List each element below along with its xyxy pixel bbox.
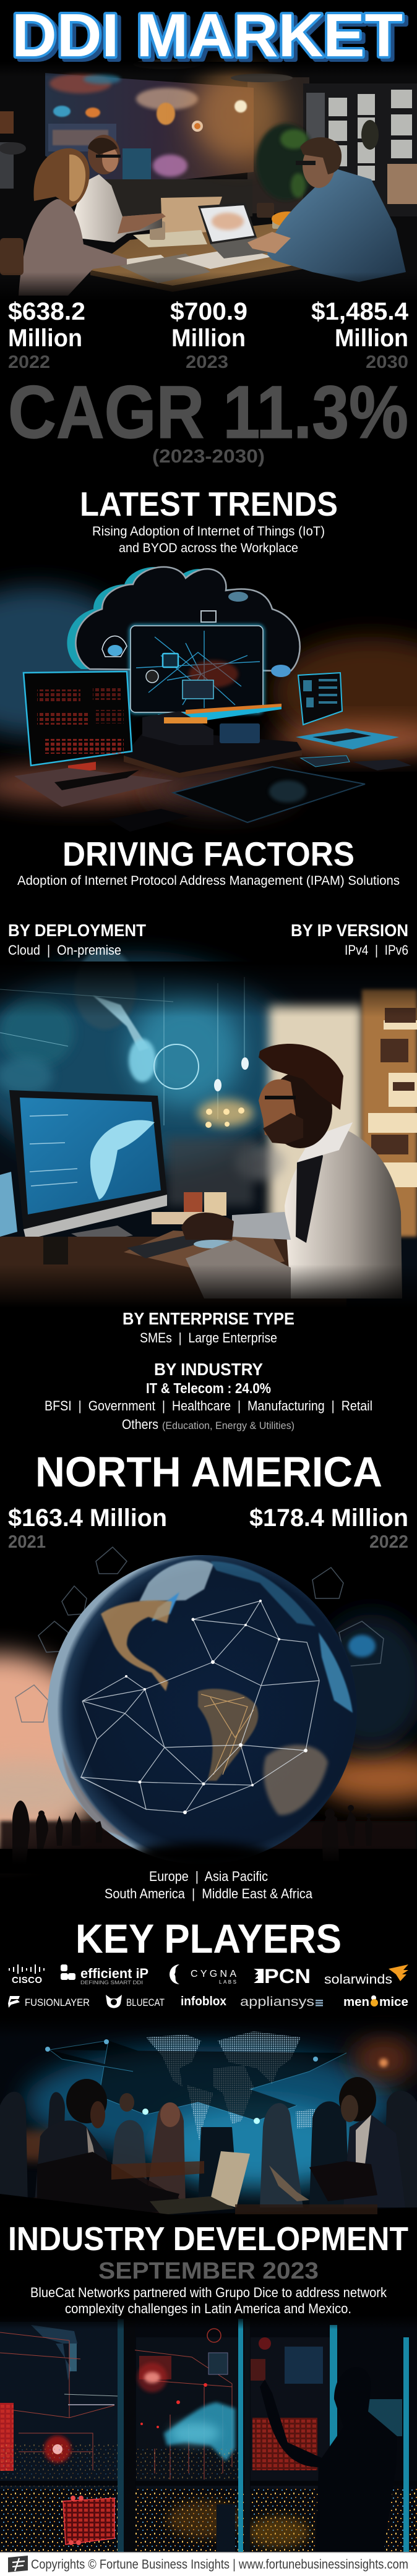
logo: BlueCat: BLUECAT — [126, 1997, 165, 2008]
logo: Cisco — [9, 1964, 44, 1985]
title: DDI MARKET — [15, 4, 406, 72]
development description: BlueCat Networks partnered with Grupo Dice to address network — [30, 2285, 387, 2300]
heading: driving factors: DRIVING FACTORS — [62, 835, 355, 873]
CAGR headline: (2023-2030) — [152, 445, 265, 467]
segment: by deployment: BY DEPLOYMENT — [8, 921, 146, 940]
segment: by IP version: IPv4 | IPv6 — [345, 942, 408, 958]
heading: latest trends: LATEST TRENDS — [80, 485, 338, 523]
logo: Cygna Labs: LABS — [219, 1979, 236, 1985]
stat: 2023 market size: $700.9 — [170, 298, 247, 325]
stat: 2022 market size: $638.2 — [8, 298, 85, 325]
stat: North America 2022: $178.4 Million — [249, 1504, 408, 1532]
segment: by industry: IT & Telecom : 24.0% — [146, 1380, 271, 1396]
latest trends description: Rising Adoption of Internet of Things (IoT) — [92, 524, 325, 539]
segment: by industry: BY INDUSTRY — [154, 1360, 263, 1379]
segment: by enterprise type: BY ENTERPRISE TYPE — [123, 1309, 294, 1328]
illustration: cloud network with devices — [0, 567, 417, 832]
logo: Cygna Labs: CYGNA — [191, 1969, 236, 1979]
other regions — [105, 1869, 313, 1901]
development description — [30, 2285, 387, 2316]
logo: BlueCat — [106, 1995, 165, 2008]
icon: Fortune Business Insights logo — [8, 2556, 28, 2572]
segment: by industry: BFSI | Government | Healthcare | Manufacturing | Retail — [45, 1398, 372, 1414]
segment: by IP version — [291, 921, 408, 958]
other regions: South America | Middle East & Africa — [105, 1886, 313, 1901]
segment: by industry — [45, 1360, 372, 1432]
stat: 2030 market size: 2030 — [366, 352, 408, 372]
logo: Men and Mice: men — [343, 1995, 369, 2009]
stat: 2030 market size: Million — [335, 325, 408, 352]
segment: by enterprise type — [123, 1309, 294, 1346]
segment: by industry: (Education, Energy & Utilities) — [162, 1420, 294, 1431]
stat: 2030 market size — [311, 298, 409, 372]
logo: Infoblox: infoblox — [181, 1995, 226, 2008]
illustration: analyst at monitor with holographic map — [0, 949, 417, 1313]
segment: by deployment: Cloud | On-premise — [8, 942, 121, 958]
driving factors description: Adoption of Internet Protocol Address Management (IPAM) Solutions — [17, 874, 400, 888]
latest trends description — [92, 524, 325, 555]
segment: by deployment — [8, 921, 146, 958]
silhouettes: standing people — [12, 1801, 372, 1864]
stat: North America 2021 — [8, 1504, 167, 1552]
illustration: business team under glowing world network — [0, 2017, 417, 2221]
other regions: Europe | Asia Pacific — [149, 1869, 268, 1884]
logo: FusionLayer — [8, 1996, 90, 2008]
stat: North America 2021: 2021 — [8, 1532, 46, 1552]
stat: 2023 market size — [170, 298, 247, 372]
latest trends description: and BYOD across the Workplace — [119, 541, 298, 555]
stat: 2022 market size: Million — [8, 325, 82, 352]
logo: SolarWinds — [324, 1964, 408, 1987]
stat: North America 2021: $163.4 Million — [8, 1504, 167, 1532]
illustration: team meeting with world map wall — [0, 59, 417, 303]
stat: 2022 market size — [8, 298, 85, 372]
logo: SolarWinds: solarwinds — [324, 1973, 392, 1987]
stat: 2022 market size: 2022 — [8, 352, 50, 372]
segment: by IP version: BY IP VERSION — [291, 921, 408, 940]
illustration: network globe above silhouettes — [0, 1547, 417, 1874]
logo: efficient iP: efficient iP — [80, 1966, 148, 1981]
stat: 2023 market size: Million — [171, 325, 246, 352]
logo: Cisco: CISCO — [12, 1975, 42, 1985]
logo: PCN: PCN — [264, 1965, 311, 1987]
logo: Men and Mice: mice — [379, 1995, 408, 2009]
logo: efficient iP — [61, 1964, 148, 1985]
logo: Cygna Labs — [170, 1964, 236, 1985]
stat: 2023 market size: 2023 — [186, 352, 228, 372]
logo: efficient iP: DEFINING SMART DDI — [80, 1980, 143, 1985]
illustration: executive at window with holographic data over city — [0, 2316, 417, 2552]
date: September 2023: SEPTEMBER 2023 — [98, 2258, 319, 2284]
heading: key players: KEY PLAYERS — [75, 1916, 342, 1961]
heading: North America: NORTH AMERICA — [35, 1448, 382, 1496]
logo: FusionLayer: FUSIONLAYER — [25, 1997, 90, 2008]
segment: by enterprise type: SMEs | Large Enterprise — [140, 1330, 277, 1346]
stat: 2030 market size: $1,485.4 — [311, 298, 409, 325]
development description: complexity challenges in Latin America and Mexico. — [65, 2301, 351, 2316]
segment: by industry: Others — [122, 1417, 158, 1432]
title: DDI MARKET — [12, 1, 403, 69]
stat: North America 2022 — [249, 1504, 408, 1552]
stat: North America 2022: 2022 — [369, 1532, 408, 1552]
footer bar — [0, 2552, 417, 2576]
logo: Men and Mice — [343, 1995, 408, 2009]
logo: Appliansys: appliansys — [240, 1995, 314, 2009]
